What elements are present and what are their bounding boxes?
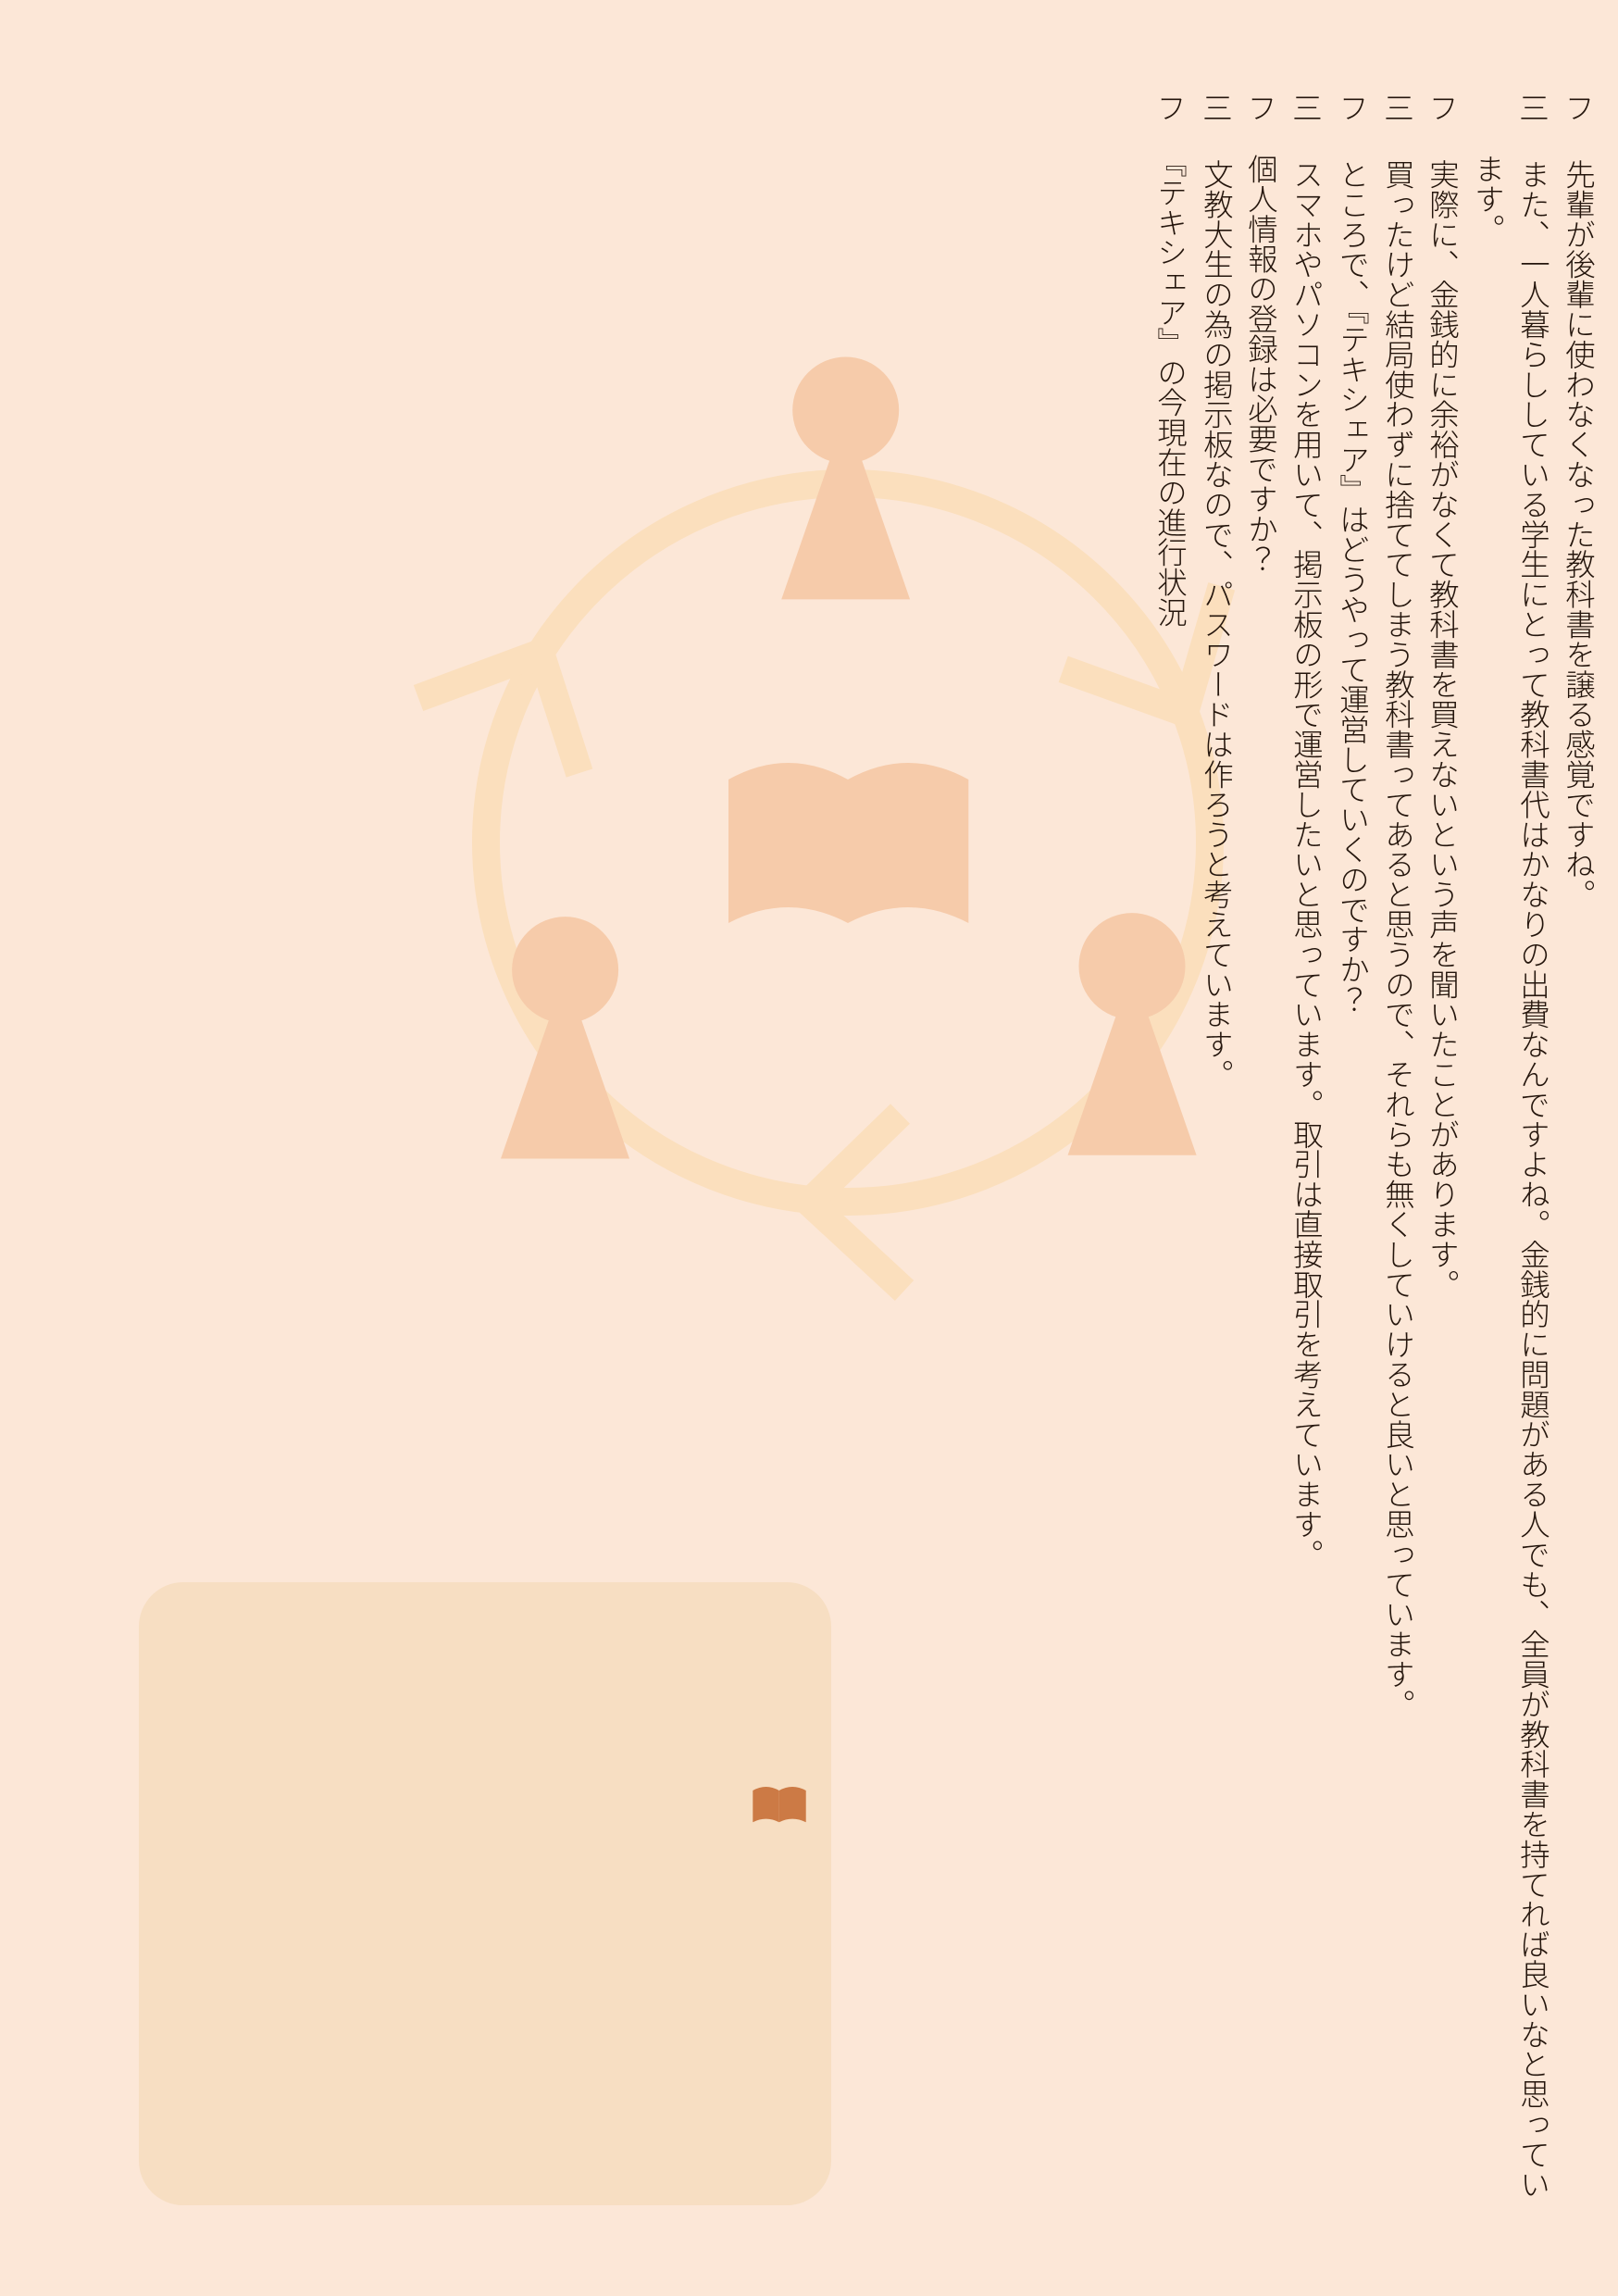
- line 9: 『テキシェア』の今現在の進行状況: [1151, 147, 1194, 627]
- person: lower right: [1068, 913, 1197, 1155]
- ring: circular arrows: [418, 483, 1222, 1291]
- arrow: top right: [1064, 586, 1222, 713]
- line 2: また、一人暮らししている学生にとって教科書代はかなりの出費なんですよね。金銭的に問題がある人でも、全員が教科書を持てれば良いなと思ってい: [1513, 159, 1557, 2199]
- line 7: 個人情報の登録は必要ですか？: [1241, 154, 1285, 574]
- line 2 continued: ます。: [1468, 154, 1512, 243]
- person: top: [781, 357, 910, 599]
- speaker mark 7: フ: [1240, 93, 1284, 122]
- line 5: ところで、『テキシェア』はどうやって運営していくのですか？: [1333, 159, 1376, 1014]
- icon: small book in panel: [753, 1787, 806, 1822]
- line 3: 実際に、金銭的に余裕がなくて教科書を買えないという声を聞いたことがあります。: [1423, 159, 1466, 1299]
- line 4: 買ったけど結局使わずに捨ててしまう教科書ってあると思うので、それらも無くしていけると良いと思っています。: [1378, 159, 1422, 1719]
- speaker mark 4: 三: [1377, 93, 1421, 122]
- dialogue text: vertical columns: [1150, 93, 1602, 2199]
- speaker mark 6: 三: [1286, 93, 1329, 122]
- line 6: スマホやパソコンを用いて、掲示板の形で運営したいと思っています。取引は直接取引を考えています。: [1287, 159, 1330, 1569]
- person: lower left: [501, 917, 629, 1159]
- speaker mark 3: フ: [1422, 93, 1465, 122]
- speaker mark 8: 三: [1196, 93, 1239, 122]
- line 8: 文教大生の為の掲示板なので、パスワードは作ろうと考えています。: [1197, 159, 1240, 1089]
- icon: open book in centre: [728, 763, 968, 923]
- arrow: bottom: [809, 1114, 904, 1291]
- panel: empty progress card: [139, 1582, 831, 2205]
- speaker mark 5: フ: [1332, 93, 1375, 122]
- line 1: 先輩が後輩に使わなくなった教科書を譲る感覚ですね。: [1559, 159, 1602, 909]
- arrow: left: [418, 653, 579, 773]
- speaker mark 1: フ: [1558, 93, 1601, 122]
- speaker mark 9: フ: [1150, 93, 1193, 122]
- speaker mark 2: 三: [1512, 93, 1556, 122]
